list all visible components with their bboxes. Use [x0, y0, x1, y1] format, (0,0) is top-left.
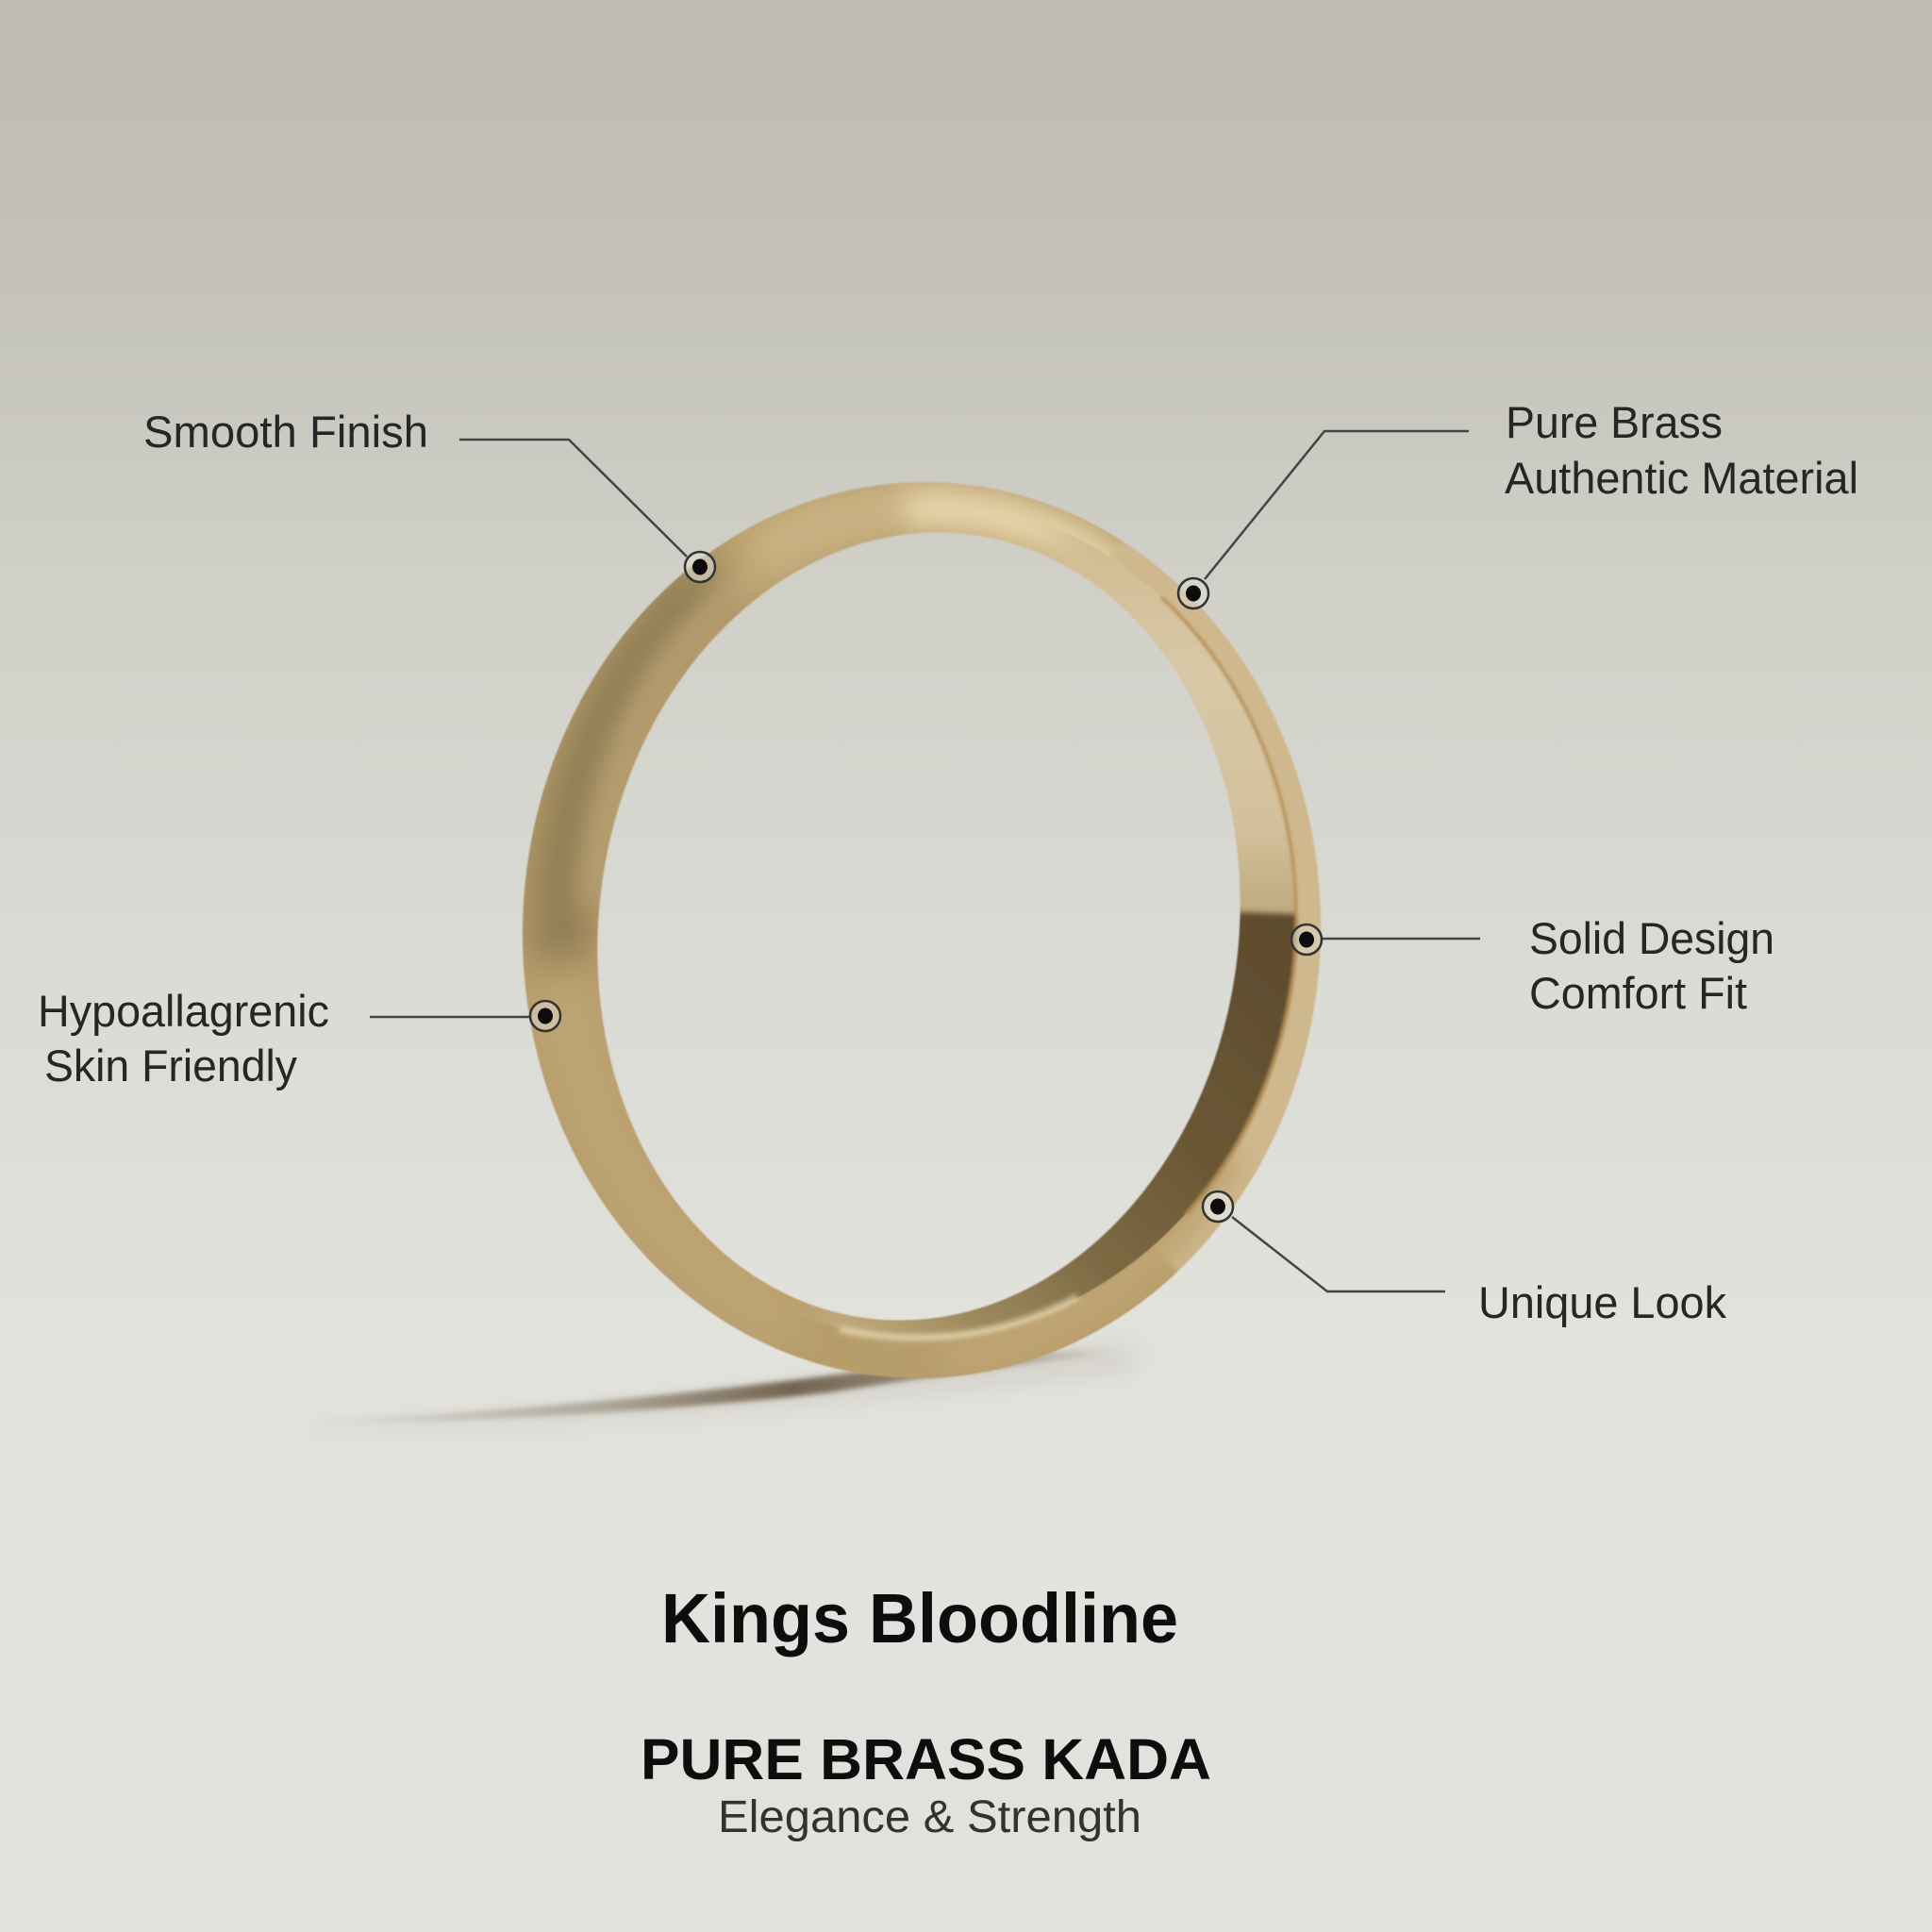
ring shadow — [302, 1347, 1141, 1432]
callout: Hypoallagrenic: Skin Friendly — [44, 1041, 297, 1091]
callout: Smooth Finish — [143, 407, 715, 582]
tagline: Elegance & Strength — [718, 1792, 1141, 1842]
inner surface: shaded lower part — [818, 908, 1296, 1335]
inner surface — [818, 530, 1296, 1335]
callout: Pure Brass: Authentic Material — [1505, 453, 1858, 503]
callout: Pure Brass: Pure Brass — [1506, 397, 1723, 447]
lower crease line — [1186, 918, 1296, 1214]
upper crease line — [1161, 597, 1296, 918]
inner surface: lit upper part — [1053, 530, 1294, 915]
callout: Solid Design: Comfort Fit — [1529, 968, 1747, 1018]
lower rim highlight — [840, 1297, 1077, 1338]
callout: Solid Design: Solid Design — [1529, 913, 1774, 963]
product name: PURE BRASS KADA — [641, 1727, 1211, 1791]
callout: Smooth Finish: Smooth Finish — [143, 407, 428, 457]
callout: Unique Look — [1203, 1191, 1726, 1327]
callout: Solid Design — [1291, 913, 1774, 1018]
callout: Pure Brass — [1178, 397, 1858, 608]
callout: Hypoallagrenic — [38, 986, 560, 1091]
callout: Hypoallagrenic: Hypoallagrenic — [38, 986, 329, 1036]
brass kada ring — [522, 481, 1322, 1379]
callout: Unique Look: Unique Look — [1478, 1277, 1726, 1327]
brand title: Kings Bloodline — [661, 1579, 1178, 1657]
